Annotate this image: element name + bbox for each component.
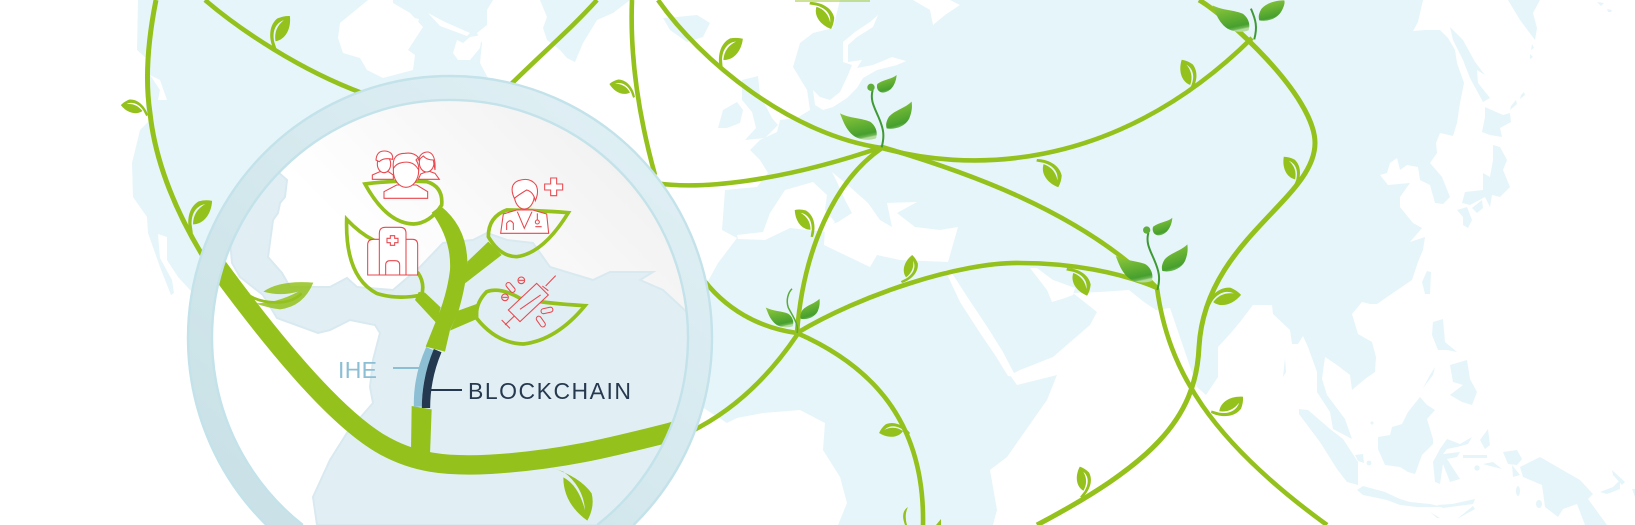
icon: hospital	[368, 227, 418, 275]
sprout: left small	[766, 289, 820, 333]
trunk base	[411, 406, 432, 455]
faded leaf	[245, 282, 313, 309]
lens ring	[188, 76, 712, 525]
tree leaves	[347, 181, 585, 344]
sprout: east	[1116, 218, 1188, 290]
leaf below vine	[551, 467, 593, 521]
small vine leaves	[120, 1, 1304, 525]
magnifying lens	[188, 76, 712, 525]
label: IHE	[338, 357, 422, 383]
tree trunk and branches	[415, 206, 502, 352]
magnified map	[230, 172, 690, 525]
blockchain pipe	[426, 351, 438, 408]
lens glass	[210, 98, 690, 525]
thick vine and tree	[200, 151, 677, 521]
main thick vine	[200, 243, 677, 465]
sprout: central Europe	[840, 75, 912, 147]
icon: patients group	[372, 151, 439, 198]
label: IHE: IHE	[338, 357, 377, 383]
label: BLOCKCHAIN: BLOCKCHAIN	[468, 378, 631, 404]
icon: syringe and pills	[502, 276, 556, 328]
icon: doctor	[501, 178, 563, 233]
IHE pipe	[418, 349, 430, 407]
sprout: top right	[1213, 0, 1285, 39]
vine network	[148, 0, 1327, 525]
